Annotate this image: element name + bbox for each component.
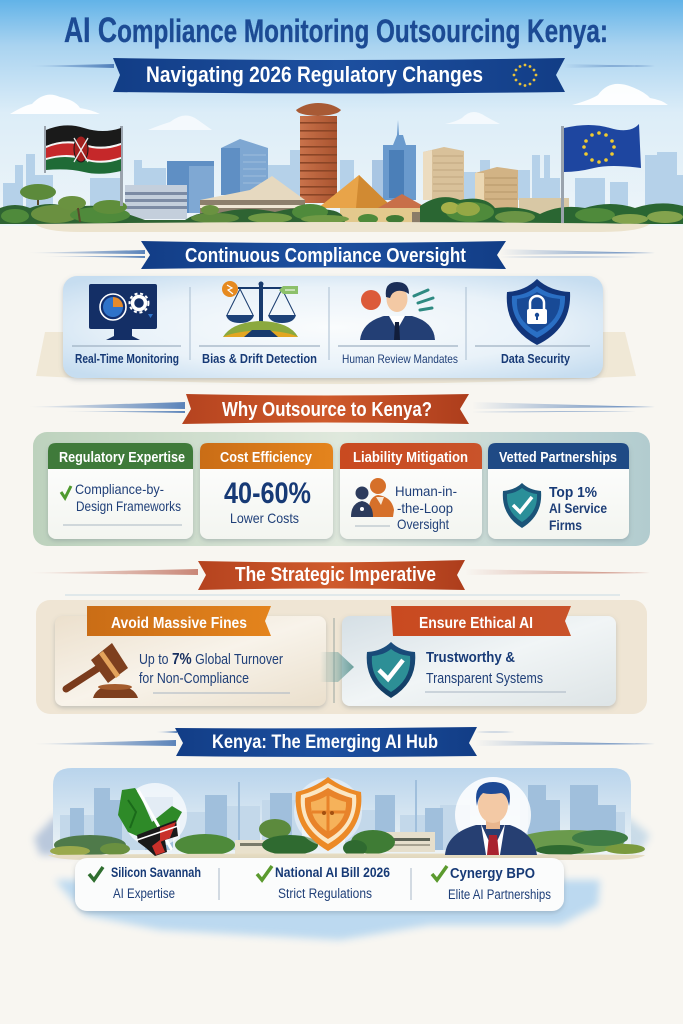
icon: EU flag — [561, 124, 641, 223]
icon: Kenya map — [118, 783, 187, 856]
icon: monitor — [89, 284, 157, 340]
section heading: The Strategic Imperative: The Strategic Imperative — [235, 564, 436, 586]
card: liability mitigation — [340, 443, 482, 539]
card: regulatory expertise: Regulatory Expertise — [59, 450, 185, 466]
text: ethical — [425, 650, 566, 692]
card: cost efficiency: 40-60% — [224, 477, 311, 510]
section heading: Why Outsource to Kenya? — [25, 394, 655, 424]
tab: avoid massive fines — [87, 606, 271, 636]
arrow — [320, 652, 354, 682]
text: ethical: Trustworthy & — [426, 650, 515, 666]
section heading: The Strategic Imperative — [25, 560, 650, 595]
ground line — [48, 854, 645, 860]
icon: check shield — [503, 483, 541, 528]
icon: two people — [351, 478, 394, 517]
fact: Cynergy BPO: Cynergy BPO — [450, 866, 535, 882]
ground strip — [35, 222, 650, 232]
text: fines: for Non-Compliance — [139, 671, 249, 687]
card: vetted partnerships: AI Service — [549, 500, 607, 516]
section heading: Kenya: The Emerging AI Hub: Kenya: The Emerging AI Hub — [212, 732, 438, 753]
section heading: Continuous Compliance Oversight: Continuous Compliance Oversight — [185, 245, 466, 267]
text: fines: Up to 7% Global Turnover — [139, 651, 283, 668]
section heading: Kenya: The Emerging AI Hub — [30, 727, 655, 757]
card: liability mitigation: Liability Mitigation — [353, 450, 468, 466]
label: Bias & Drift Detection — [202, 351, 317, 366]
card: vetted partnerships: Firms — [549, 517, 582, 533]
trees row — [0, 197, 683, 224]
card: cost efficiency — [200, 443, 333, 539]
label: Data Security — [501, 351, 571, 366]
subtitle ribbon: Navigating 2026 Regulatory Changes — [146, 62, 483, 87]
card: liability mitigation: -the-Loop — [397, 500, 453, 516]
watercolor wash around hub — [34, 815, 650, 940]
hub buildings — [235, 832, 435, 855]
card: vetted partnerships: Vetted Partnerships — [499, 450, 617, 466]
icon: business person — [445, 777, 537, 855]
icon: gavel — [66, 643, 138, 698]
fact: Silicon Savannah: Silicon Savannah — [111, 865, 201, 880]
icon: Kenya flag — [44, 125, 123, 206]
cream backdrop behind oversight panel — [36, 332, 636, 384]
KICC tower — [296, 103, 341, 203]
subtitle ribbon — [28, 58, 655, 94]
fact: National AI Bill 2026 — [257, 865, 390, 901]
card: vetted partnerships: Top 1% — [549, 485, 597, 501]
hub trees — [50, 819, 645, 856]
fact: Silicon Savannah — [89, 865, 201, 901]
panel: emerging AI hub illustration — [48, 768, 645, 860]
header sky background — [0, 0, 683, 226]
fact: National AI Bill 2026: National AI Bill 2026 — [275, 865, 390, 880]
icon: human reviewer — [360, 282, 435, 340]
text: ethical: Transparent Systems — [426, 671, 543, 687]
label: Human Review Mandates — [342, 352, 458, 366]
acacia trees — [20, 184, 480, 222]
card: regulatory expertise: Compliance-by- — [75, 481, 164, 497]
card: cost efficiency: Lower Costs — [230, 510, 299, 526]
icon: shield lock — [507, 279, 570, 345]
panel: continuous compliance oversight — [63, 276, 603, 378]
section heading: Continuous Compliance Oversight — [25, 241, 655, 269]
fact: Cynergy BPO — [432, 866, 551, 902]
label: Real-Time Monitoring — [75, 352, 179, 366]
icon: balance scale — [222, 281, 298, 337]
section heading: Why Outsource to Kenya?: Why Outsource to Kenya? — [222, 399, 432, 421]
low pyramids — [200, 176, 305, 214]
icon: EU star ring on ribbon — [513, 64, 537, 87]
fact: Cynergy BPO: Elite AI Partnerships — [448, 887, 551, 902]
hub skyline — [60, 780, 625, 852]
text: fines — [139, 651, 290, 693]
tab: ensure ethical AI — [391, 606, 571, 636]
card: vetted partnerships — [488, 443, 629, 539]
skyline illustration — [0, 84, 683, 232]
mid buildings — [221, 139, 268, 195]
fact: National AI Bill 2026: Strict Regulations — [278, 886, 372, 901]
far skyline — [3, 150, 683, 218]
card: cost efficiency: Cost Efficiency — [220, 450, 312, 466]
card: regulatory expertise: Design Frameworks — [76, 498, 181, 514]
panel: why outsource to Kenya — [33, 432, 650, 546]
card: liability mitigation: Human-in- — [395, 483, 457, 499]
clouds — [10, 84, 668, 130]
icon: orange shield — [294, 777, 362, 851]
panel: strategic imperative — [36, 600, 647, 714]
panel: hub facts — [75, 858, 564, 911]
card: regulatory expertise — [48, 443, 193, 539]
tab: avoid massive fines: Avoid Massive Fines — [111, 615, 247, 632]
icon: ethical shield — [367, 642, 415, 698]
tab: ensure ethical AI: Ensure Ethical AI — [419, 615, 533, 632]
card: liability mitigation: Oversight — [397, 516, 449, 532]
fact: Silicon Savannah: AI Expertise — [113, 886, 175, 901]
